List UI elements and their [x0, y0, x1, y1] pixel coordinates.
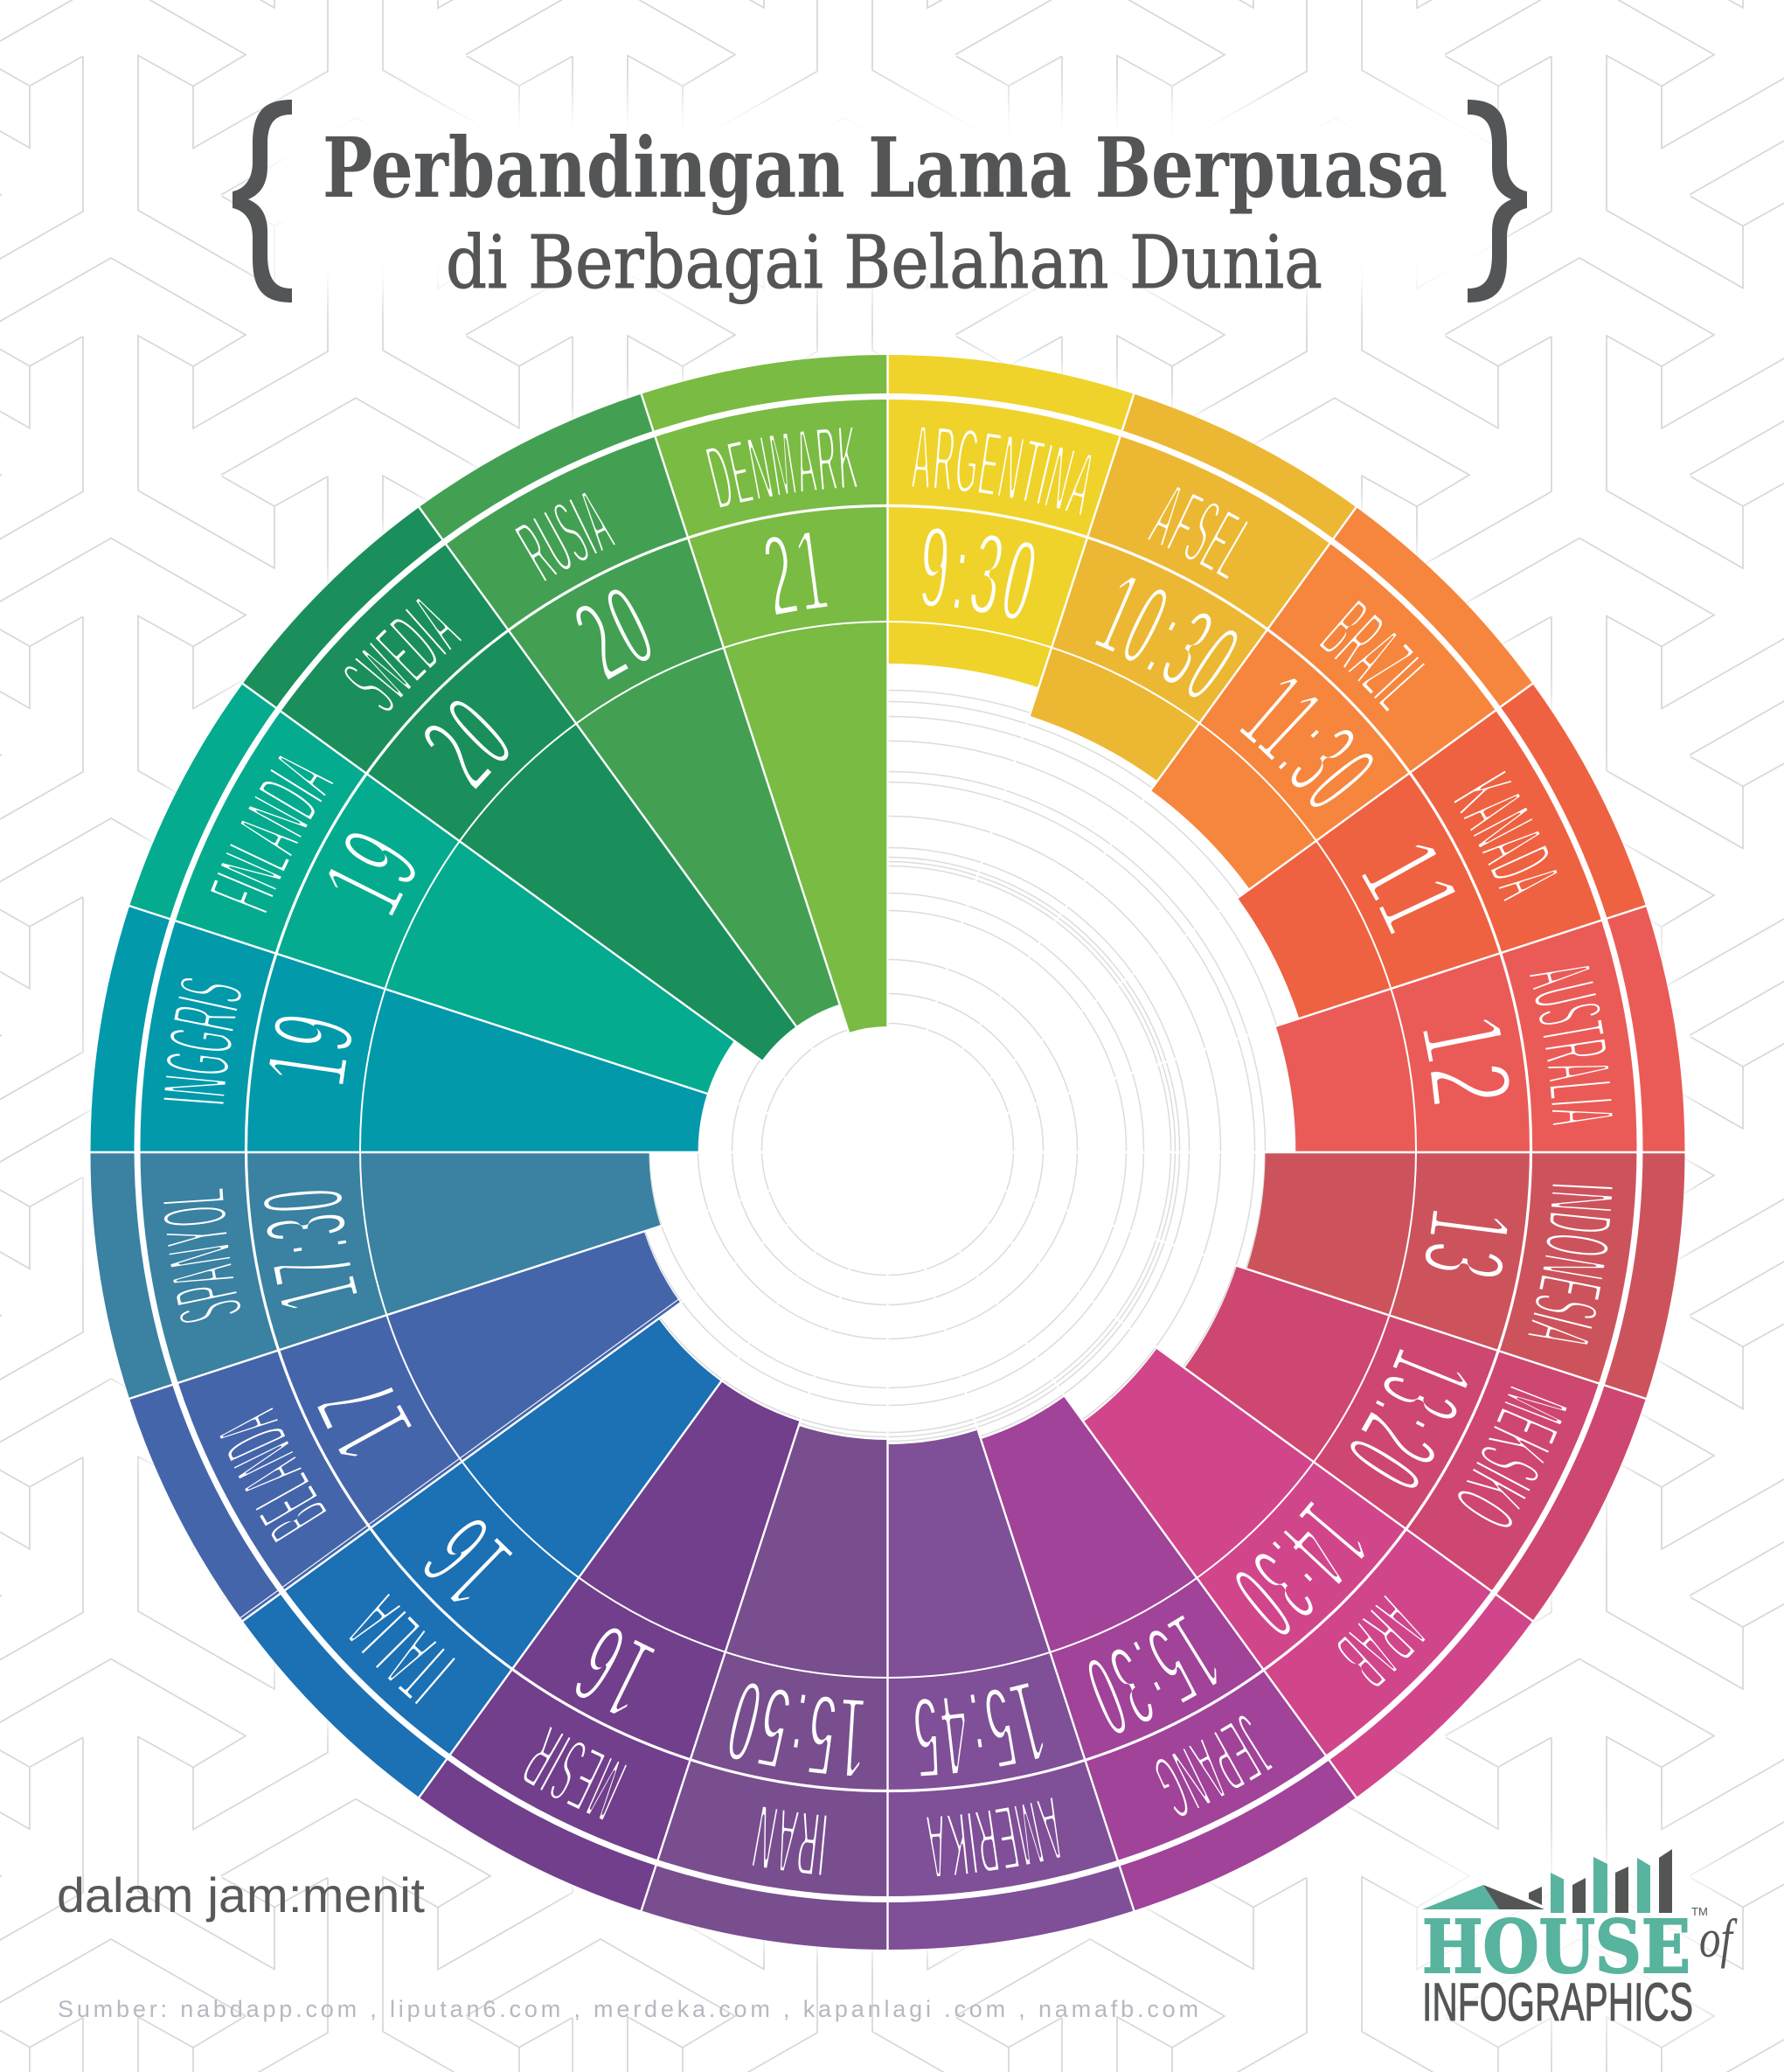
radial chart: fasting durations: [91, 355, 1685, 1950]
right brace: [1468, 100, 1527, 302]
rings and separators: [89, 354, 1686, 1950]
title: [233, 100, 1527, 305]
duration: Amerika: 15:45: [915, 1683, 1044, 1776]
sources: Sumber: nabdapp.com , liputan6.com , merdeka.com , kapanlagi .com , namafb.com: [58, 1996, 1198, 2022]
label: Finlandia: FINLANDIA: [211, 755, 334, 913]
duration: Belanda: 17: [317, 1387, 412, 1457]
logo word: HOUSE: HOUSE: [1422, 1904, 1690, 1990]
label: Italia: ITALIA: [350, 1593, 455, 1705]
label: Amerika: AMERIKA: [926, 1797, 1060, 1876]
label: Kanada: KANADA: [1454, 771, 1558, 901]
wedge: Argentina: [888, 355, 1134, 687]
left brace: [233, 100, 292, 302]
duration: Denmark: 21: [766, 532, 827, 615]
logo: House of Infographics: [1422, 1849, 1738, 2032]
title line 1: Perbandingan Lama Berpuasa: [323, 120, 1447, 217]
wedge: Belanda: [98, 1096, 691, 1621]
label: Belanda: BELANDA: [220, 1408, 327, 1542]
wedge: Inggris: [91, 906, 707, 1152]
label: Jepang: JEPANG: [1156, 1715, 1273, 1816]
duration: Spanyol: 17:30: [264, 1191, 357, 1308]
duration: Arab: 14:30: [1236, 1501, 1364, 1635]
label: Inggris: INGGRIS: [164, 978, 241, 1104]
duration: Indonesia: 13: [1425, 1211, 1507, 1276]
duration: Italia: 16: [425, 1519, 512, 1602]
wedge: Mesir: [407, 1332, 804, 1910]
label: Indonesia: INDONESIA: [1528, 1184, 1614, 1345]
wedge: Swedia: [243, 484, 913, 1065]
label: Iran: IRAN: [752, 1806, 827, 1874]
country labels: [135, 393, 1668, 1902]
title line 2: di Berbagai Belahan Dunia: [446, 220, 1322, 305]
chart centre: [399, 663, 1378, 1642]
wedge: Denmark: [642, 318, 1085, 1039]
wedge: Afsel: [1023, 394, 1368, 813]
label: Afsel: AFSEL: [1148, 487, 1248, 579]
wedge: Amerika: [739, 1416, 1134, 1986]
duration: Swedia: 20: [425, 701, 509, 789]
duration: Meksiko: 13:20: [1350, 1349, 1468, 1488]
wedge: Iran: [642, 1426, 888, 1950]
wedge: Italia: [219, 1226, 729, 1797]
duration: Argentina: 9:30: [922, 528, 1035, 619]
label: Rusia: RUSIA: [515, 493, 615, 581]
duration: Mesir: 16: [576, 1628, 656, 1714]
duration: Afsel: 10:30: [1095, 577, 1238, 698]
wedge: Brazil: [1138, 507, 1556, 953]
logo icon: house and bars: [1422, 1849, 1672, 1913]
wedge: Meksiko: [1143, 1260, 1646, 1633]
duration: Kanada: 11: [1362, 845, 1455, 934]
wedge: Kanada: [1220, 684, 1677, 1109]
label: Argentina: ARGENTINA: [913, 428, 1091, 515]
wedge: Australia: [1257, 906, 1722, 1267]
label: Swedia: SWEDIA: [344, 598, 462, 711]
label: Australia: AUSTRALIA: [1530, 965, 1612, 1125]
label: Mesir: MESIR: [524, 1727, 627, 1820]
unit note: dalam jam:menit: [57, 1867, 425, 1923]
wedge: Arab: [999, 1338, 1532, 1820]
label: Arab: ARAB: [1337, 1595, 1425, 1686]
label: Brazil: BRAZIL: [1320, 600, 1425, 712]
logo word: of: of: [1699, 1909, 1738, 1969]
duration: Rusia: 20: [576, 589, 650, 680]
duration: Brazil: 11:30: [1239, 678, 1373, 807]
wedge: Rusia: [419, 363, 1000, 1033]
wedge: Jepang: [857, 1384, 1357, 1942]
duration: Inggris: 19: [269, 1016, 351, 1084]
wedge: Spanyol: [53, 988, 672, 1399]
label: Spanyol: SPANYOL: [163, 1189, 240, 1323]
durations: [220, 497, 1549, 1823]
duration: Jepang: 15:30: [1089, 1616, 1217, 1733]
wedge: Finlandia: [129, 671, 792, 1096]
duration: Iran: 15:50: [729, 1684, 865, 1776]
label: Denmark: DENMARK: [706, 427, 857, 507]
wedge: Indonesia: [1246, 1152, 1685, 1399]
label: Meksiko: MEKSIKO: [1458, 1387, 1566, 1527]
duration: Finlandia: 19: [329, 833, 415, 916]
logo trademark: TM: [1691, 1905, 1708, 1918]
duration: Australia: 12: [1423, 1019, 1509, 1104]
wedges: [53, 318, 1722, 1986]
